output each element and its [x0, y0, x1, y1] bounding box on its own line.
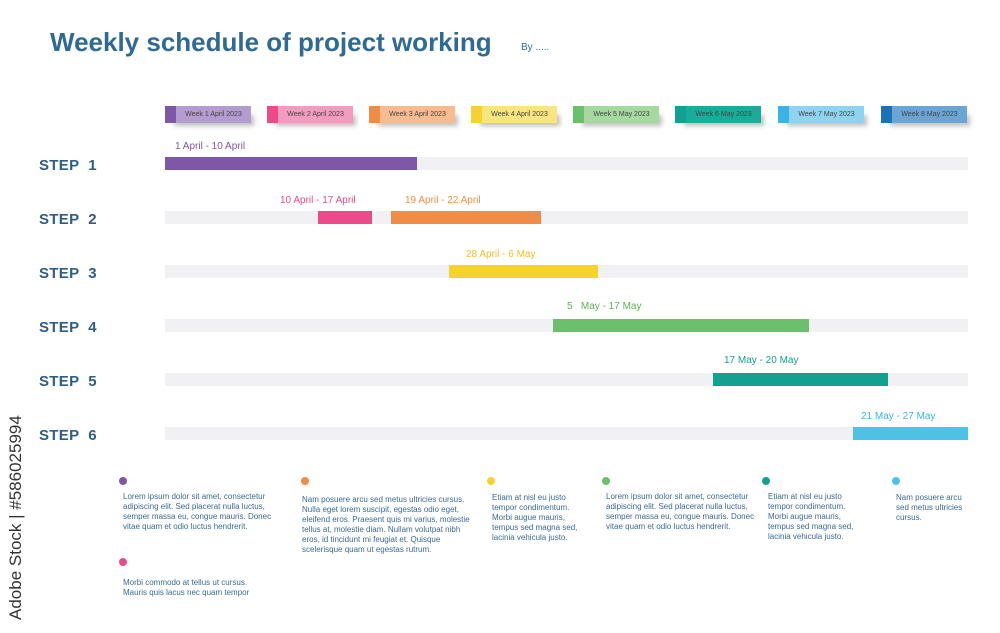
label step 2a: 10 April - 17 April	[280, 195, 356, 206]
week 3: Week 3 April 2023	[389, 111, 446, 118]
week 4: Week 4 April 2023	[491, 111, 548, 118]
bar step 6	[853, 427, 968, 440]
notes: Morbi commodo at tellus ut cursus. Mauris quis lacus nec quam tempor	[123, 578, 249, 597]
note pink	[119, 558, 127, 566]
notes: Nam posuere arcu sed metus ultricies cursus.	[896, 493, 962, 522]
label step 3: 28 April - 6 May	[466, 249, 535, 260]
step 2: STEP 2	[39, 211, 97, 228]
note green	[602, 477, 610, 485]
notes: Etiam at nisl eu justo tempor condimentum. Morbi augue mauris, tempus sed magna sed, lacinia vehicula justo.	[768, 492, 853, 541]
label step 5: 17 May - 20 May	[724, 355, 798, 366]
note blue	[892, 477, 900, 485]
note orange	[301, 477, 309, 485]
week 7	[778, 106, 864, 123]
week 7: Week 7 May 2023	[798, 111, 855, 118]
bar step 3	[449, 265, 598, 278]
byline: By .....	[521, 42, 549, 53]
step 4: STEP 4	[39, 319, 97, 336]
title: Weekly schedule of project working	[50, 27, 492, 57]
notes: Lorem ipsum dolor sit amet, consectetur adipiscing elit. Sed placerat nulla luctus, semper massa eu, congue mauris. Donec vitae quam et odio luctus hendrerit.	[123, 492, 271, 531]
label step 1: 1 April - 10 April	[175, 141, 245, 152]
notes: Nam posuere arcu sed metus ultricies cursus. Nulla eget lorem suscipit, egestas odio eget, eleifend eros. Praesent quis mi varius, molestie tellus at, molestie diam. Nullam volutpat nibh eros, id tincidunt mi feugiat et. Quisque scelerisque quam ut egestas rutrum.	[302, 495, 470, 554]
week 4	[471, 106, 557, 123]
watermark: Adobe Stock | #586025994	[6, 415, 25, 620]
week 8	[881, 106, 967, 123]
label step 2b: 19 April - 22 April	[405, 195, 481, 206]
week headers	[165, 106, 972, 128]
bar step 5	[713, 373, 888, 386]
week 1: Week 1 April 2023	[185, 111, 242, 118]
step 5: STEP 5	[39, 373, 97, 390]
week 2	[267, 106, 353, 123]
week 6	[675, 106, 761, 123]
week 6: Week 6 May 2023	[695, 111, 752, 118]
notes: Lorem ipsum dolor sit amet, consectetur adipiscing elit. Sed placerat nulla luctus, semper massa eu, congue mauris. Donec vitae quam et odio luctus hendrerit.	[606, 492, 754, 531]
note teal	[762, 477, 770, 485]
step 6: STEP 6	[39, 427, 97, 444]
step 1: STEP 1	[39, 157, 97, 174]
notes: Etiam at nisl eu justo tempor condimentum. Morbi augue mauris, tempus sed magna sed, lacinia vehicula justo.	[492, 493, 577, 542]
label step 4: 5 May - 17 May	[567, 301, 641, 312]
week 3	[369, 106, 455, 123]
week 8: Week 8 May 2023	[901, 111, 958, 118]
gantt chart	[165, 141, 968, 440]
bar step 2b	[391, 211, 541, 224]
note purple	[119, 477, 127, 485]
step labels	[39, 157, 97, 444]
week 5	[573, 106, 659, 123]
bar step 1	[165, 157, 417, 170]
week 1	[165, 106, 251, 123]
note yellow	[487, 477, 495, 485]
notes	[119, 477, 962, 597]
week 5: Week 5 May 2023	[593, 111, 650, 118]
bar step 2a	[318, 211, 372, 224]
label step 6: 21 May - 27 May	[861, 411, 935, 422]
step 3: STEP 3	[39, 265, 97, 282]
week 2: Week 2 April 2023	[287, 111, 344, 118]
bar step 4	[553, 319, 809, 332]
